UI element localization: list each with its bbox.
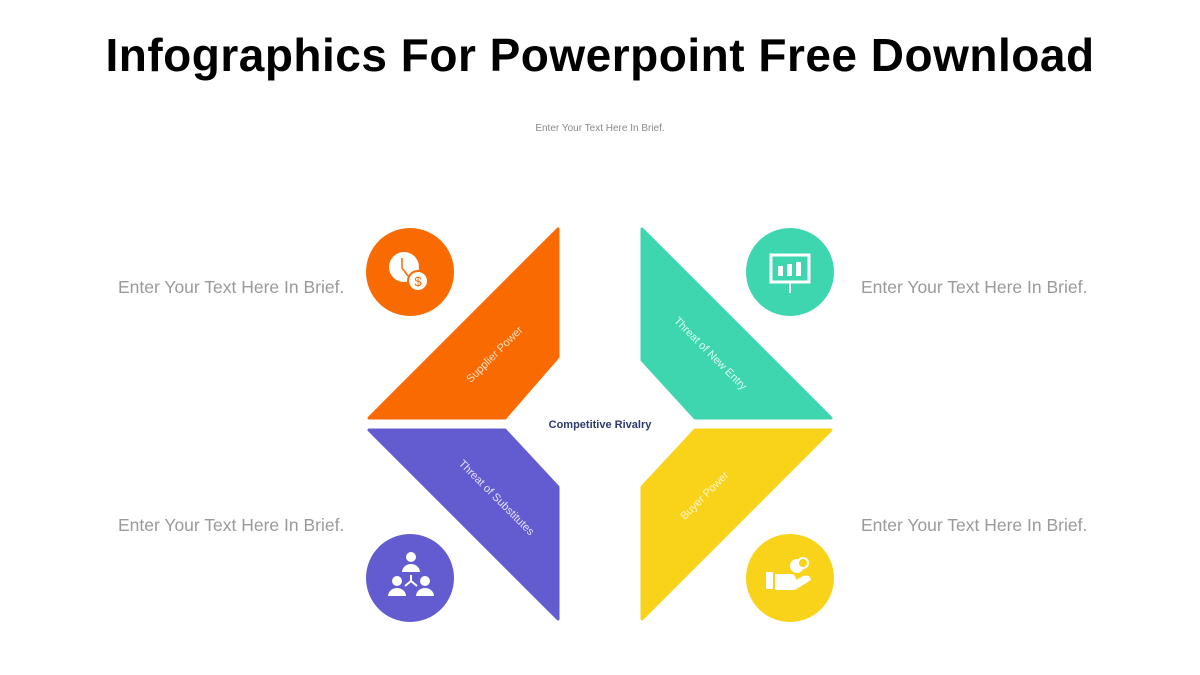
icon: people [366,534,454,622]
icon: hand coin [746,534,834,622]
panel: buyer power [642,430,831,619]
icon: presentation board [746,228,834,316]
panel: threat of new entry: Threat of New Entry [671,315,749,393]
subtitle: Enter Your Text Here In Brief. [535,123,665,134]
text: top left: Enter Your Text Here In Brief. [118,277,344,297]
center label: Competitive Rivalry [549,419,652,431]
text: bottom left: Enter Your Text Here In Brief. [118,515,344,535]
icon: clock dollar: $ [414,274,422,289]
text: bottom right: Enter Your Text Here In Brief. [861,515,1087,535]
panel: supplier power: Supplier Power [464,324,526,385]
panel: threat of new entry [642,229,831,418]
panel: buyer power: Buyer Power [678,469,732,522]
text: top right: Enter Your Text Here In Brief. [861,277,1087,297]
panel: threat of substitutes: Threat of Substitutes [456,458,537,538]
title: Infographics For Powerpoint Free Download [105,29,1095,81]
panel: threat of substitutes [369,430,558,619]
icon: clock dollar [366,228,454,316]
panel: supplier power [369,229,558,418]
